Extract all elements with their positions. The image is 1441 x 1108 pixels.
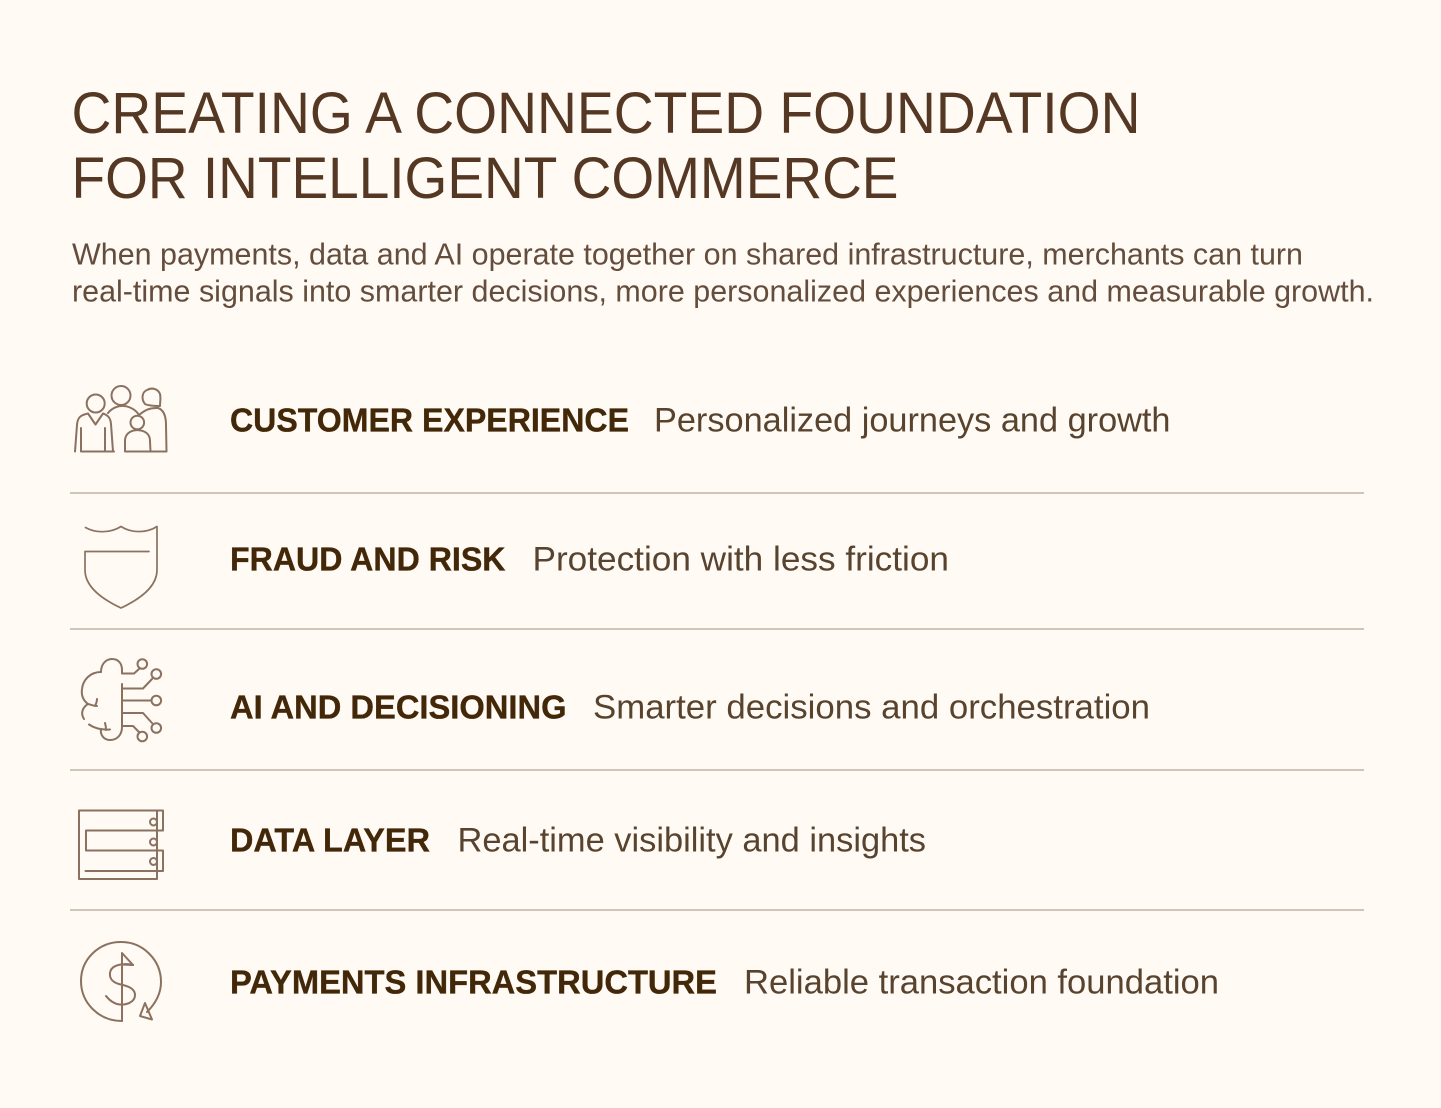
intro text: When payments, data and AI operate together on shared infrastructure, merchants can turn — [72, 236, 1303, 272]
title: FOR INTELLIGENT COMMERCE — [72, 146, 898, 211]
heading: payments infrastructure: PAYMENTS INFRASTRUCTURE — [230, 965, 717, 1002]
row: customer experience — [75, 386, 1170, 452]
description: data layer: Real-time visibility and insights — [458, 822, 926, 860]
icon: family of people — [75, 386, 166, 452]
heading: data layer: DATA LAYER — [230, 823, 430, 860]
description: payments infrastructure: Reliable transaction foundation — [744, 964, 1219, 1002]
description: ai and decisioning: Smarter decisions and orchestration — [593, 689, 1150, 727]
heading: fraud and risk: FRAUD AND RISK — [230, 542, 506, 579]
icon: dollar in circular arrow — [81, 942, 161, 1021]
intro text: real-time signals into smarter decisions, more personalized experiences and measurable growth. — [72, 274, 1374, 308]
intro text — [72, 236, 1374, 308]
title: CREATING A CONNECTED FOUNDATION — [72, 81, 1140, 146]
heading: customer experience: CUSTOMER EXPERIENCE — [230, 403, 629, 440]
heading: ai and decisioning: AI AND DECISIONING — [230, 690, 566, 727]
row: fraud and risk — [85, 526, 949, 608]
description: fraud and risk: Protection with less friction — [532, 541, 949, 579]
description: customer experience: Personalized journeys and growth — [654, 402, 1170, 440]
title — [72, 81, 1140, 211]
icon: brain circuit — [82, 659, 161, 741]
icon: shield — [85, 526, 157, 608]
row: data layer — [79, 810, 926, 879]
row: ai and decisioning — [82, 659, 1150, 741]
row: payments infrastructure — [81, 942, 1219, 1021]
icon: server stack — [79, 810, 163, 879]
